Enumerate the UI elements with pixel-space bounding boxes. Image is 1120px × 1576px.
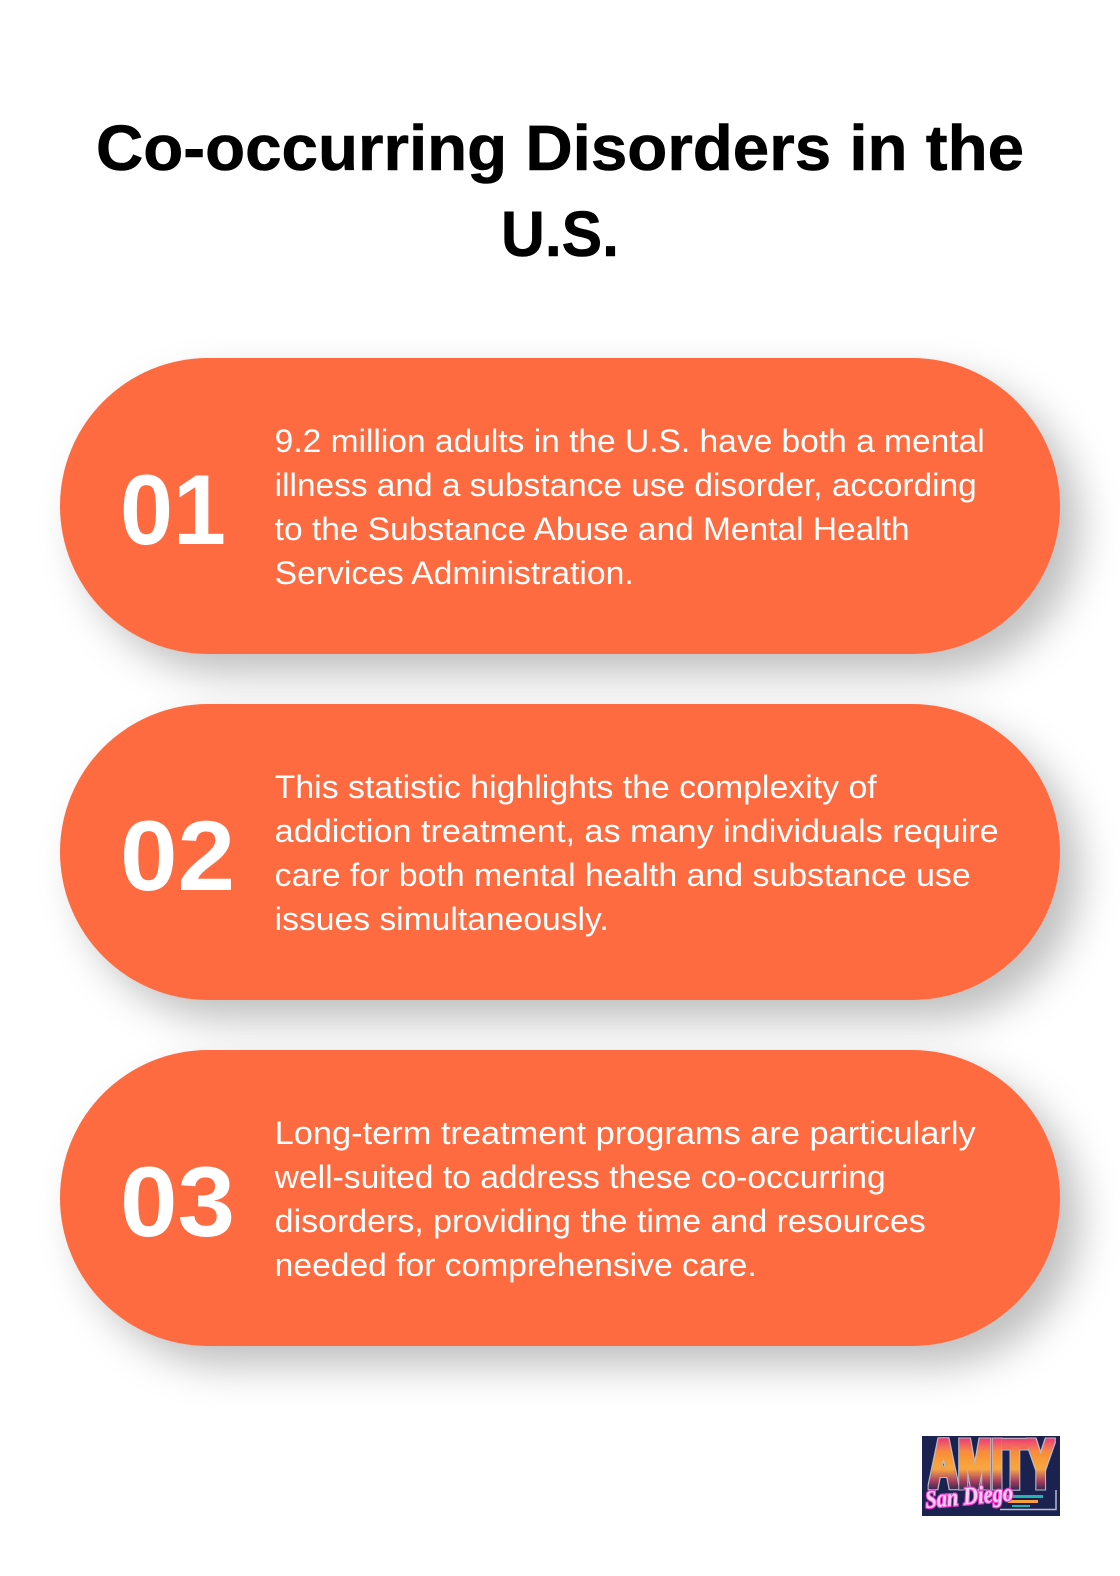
text block 03: Long-term treatment programs are particularly	[275, 1115, 976, 1151]
number 02: 02	[120, 800, 235, 911]
number 01: 01	[120, 454, 226, 565]
text block 02	[275, 769, 999, 937]
title	[96, 112, 1024, 270]
text block 01	[275, 423, 985, 591]
text block 01: Services Administration.	[275, 555, 634, 591]
text block 03	[274, 1115, 976, 1283]
text block 02: issues simultaneously.	[275, 901, 609, 937]
text block 01: 9.2 million adults in the U.S. have both a mental	[275, 423, 985, 459]
text block 01: to the Substance Abuse and Mental Health	[275, 511, 910, 547]
number 03: 03	[120, 1146, 235, 1257]
text block 01: illness and a substance use disorder, according	[275, 467, 977, 503]
logo script: San Diego	[924, 1479, 1014, 1514]
text block 02: care for both mental health and substance use	[275, 857, 971, 893]
title: U.S.	[501, 198, 619, 270]
text block 03: well-suited to address these co-occurring	[274, 1159, 886, 1195]
text block 03: disorders, providing the time and resources	[275, 1203, 926, 1239]
panel: statistic 02	[60, 704, 1080, 1020]
text block 03: needed for comprehensive care.	[275, 1247, 757, 1283]
logo: Amity San Diego	[922, 1425, 1060, 1516]
title: Co-occurring Disorders in the	[96, 112, 1024, 184]
text block 02: This statistic highlights the complexity of	[275, 769, 878, 805]
panel: statistic 01	[60, 358, 1080, 674]
panel: statistic 03	[60, 1050, 1080, 1366]
text block 02: addiction treatment, as many individuals require	[275, 813, 999, 849]
